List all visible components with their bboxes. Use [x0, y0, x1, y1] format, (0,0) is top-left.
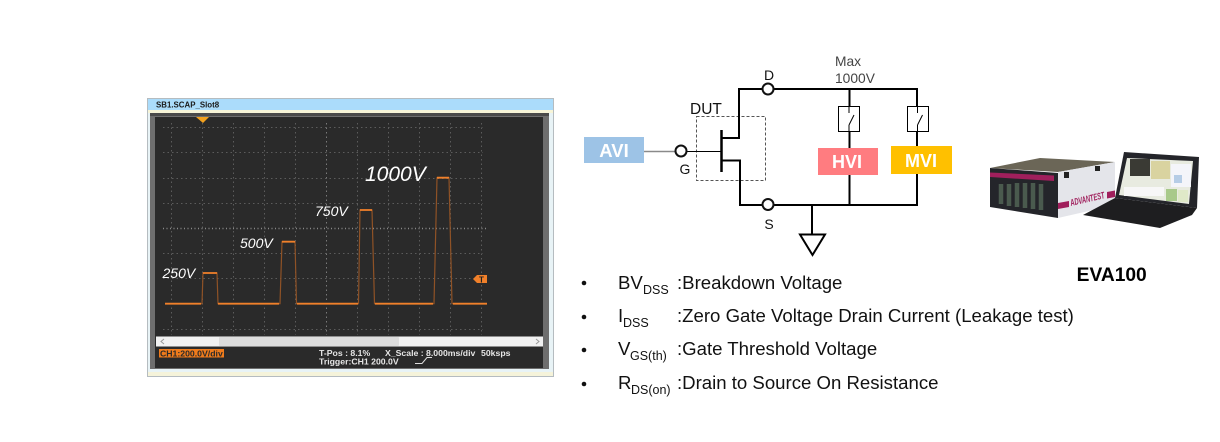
scope status readout: Trigger:CH1 200.0V: [319, 356, 399, 366]
trigger level marker: T: [479, 276, 484, 284]
label: 750V: 750V: [315, 203, 349, 219]
terminal: source: S: [764, 216, 774, 232]
label: maximum voltage: 1000V: [835, 71, 876, 86]
label: maximum voltage: Max: [835, 54, 861, 69]
label: EVA100: EVA100: [1077, 265, 1147, 286]
HVI source: [818, 148, 878, 175]
label: 250V: 250V: [162, 265, 197, 281]
item: breakdown voltage: DSS: [643, 283, 669, 297]
DUT dashed boundary: [696, 116, 766, 180]
terminal: gate: [676, 146, 690, 177]
item: drain to source on resistance: :Drain to Source On Resistance: [677, 372, 938, 393]
terminal: source: [762, 199, 774, 232]
icon: tester chassis: ADVANTEST: [1069, 190, 1106, 209]
switch: HVI relay: [838, 106, 860, 132]
item: drain to source on resistance: DS(on): [631, 383, 671, 397]
channel scale readout: CH1:200.0V/div: [160, 348, 223, 358]
gate wire: [644, 150, 676, 152]
oscilloscope window frame: [148, 98, 554, 376]
item: gate threshold voltage: GS(th): [630, 349, 667, 363]
window title: SB1.SCAP_Slot8: [156, 100, 220, 110]
item: drain to source on resistance: [582, 372, 938, 397]
item: breakdown voltage: BV: [618, 272, 643, 293]
scope status readout: T-Pos : 8.1%: [319, 348, 370, 358]
scope status readout: [319, 348, 511, 366]
item: zero gate voltage drain current: :Zero Gate Voltage Drain Current (Leakage test): [677, 305, 1074, 326]
terminal: drain: [762, 67, 774, 94]
panel: EVA100 equipment: [990, 152, 1199, 286]
label: maximum voltage: [835, 54, 876, 86]
icon: laptop: [1083, 152, 1199, 228]
panel: oscilloscope window: [148, 98, 554, 376]
scrollbar: [156, 336, 543, 346]
terminal: drain: D: [764, 67, 774, 83]
item: drain to source on resistance: R: [618, 372, 631, 393]
item: gate threshold voltage: :Gate Threshold Voltage: [677, 338, 877, 359]
label: 1000V: 1000V: [365, 163, 428, 186]
terminal: gate: G: [680, 161, 690, 177]
item: zero gate voltage drain current: [582, 305, 1074, 330]
item: breakdown voltage: :Breakdown Voltage: [677, 272, 842, 293]
item: gate threshold voltage: V: [618, 338, 631, 359]
label: 500V: 500V: [240, 235, 274, 251]
scope status readout: 50ksps: [481, 348, 511, 358]
HVI source: HVI: [832, 152, 862, 172]
label: DUT: DUT: [690, 101, 722, 118]
AVI source: AVI: [599, 140, 629, 161]
item: gate threshold voltage: [582, 338, 877, 363]
item: breakdown voltage: [582, 272, 842, 297]
transistor symbol and wiring: [687, 89, 917, 205]
ground symbol: [800, 205, 825, 255]
scope status readout: X_Scale : 8.000ms/div: [385, 348, 475, 358]
switch: MVI relay: [908, 106, 928, 132]
panel: parameter list: [582, 272, 1074, 397]
item: zero gate voltage drain current: I: [618, 305, 623, 326]
panel: circuit diagram: [584, 54, 952, 255]
item: zero gate voltage drain current: DSS: [623, 316, 649, 330]
trigger position marker: [196, 117, 209, 123]
AVI source: [584, 137, 644, 163]
trigger level marker: [473, 275, 487, 284]
voltage pulse trace: [165, 178, 487, 304]
scope grid: [163, 123, 487, 335]
MVI source: MVI: [905, 151, 937, 171]
MVI source: [891, 146, 952, 174]
icon: tester chassis: [990, 158, 1115, 218]
